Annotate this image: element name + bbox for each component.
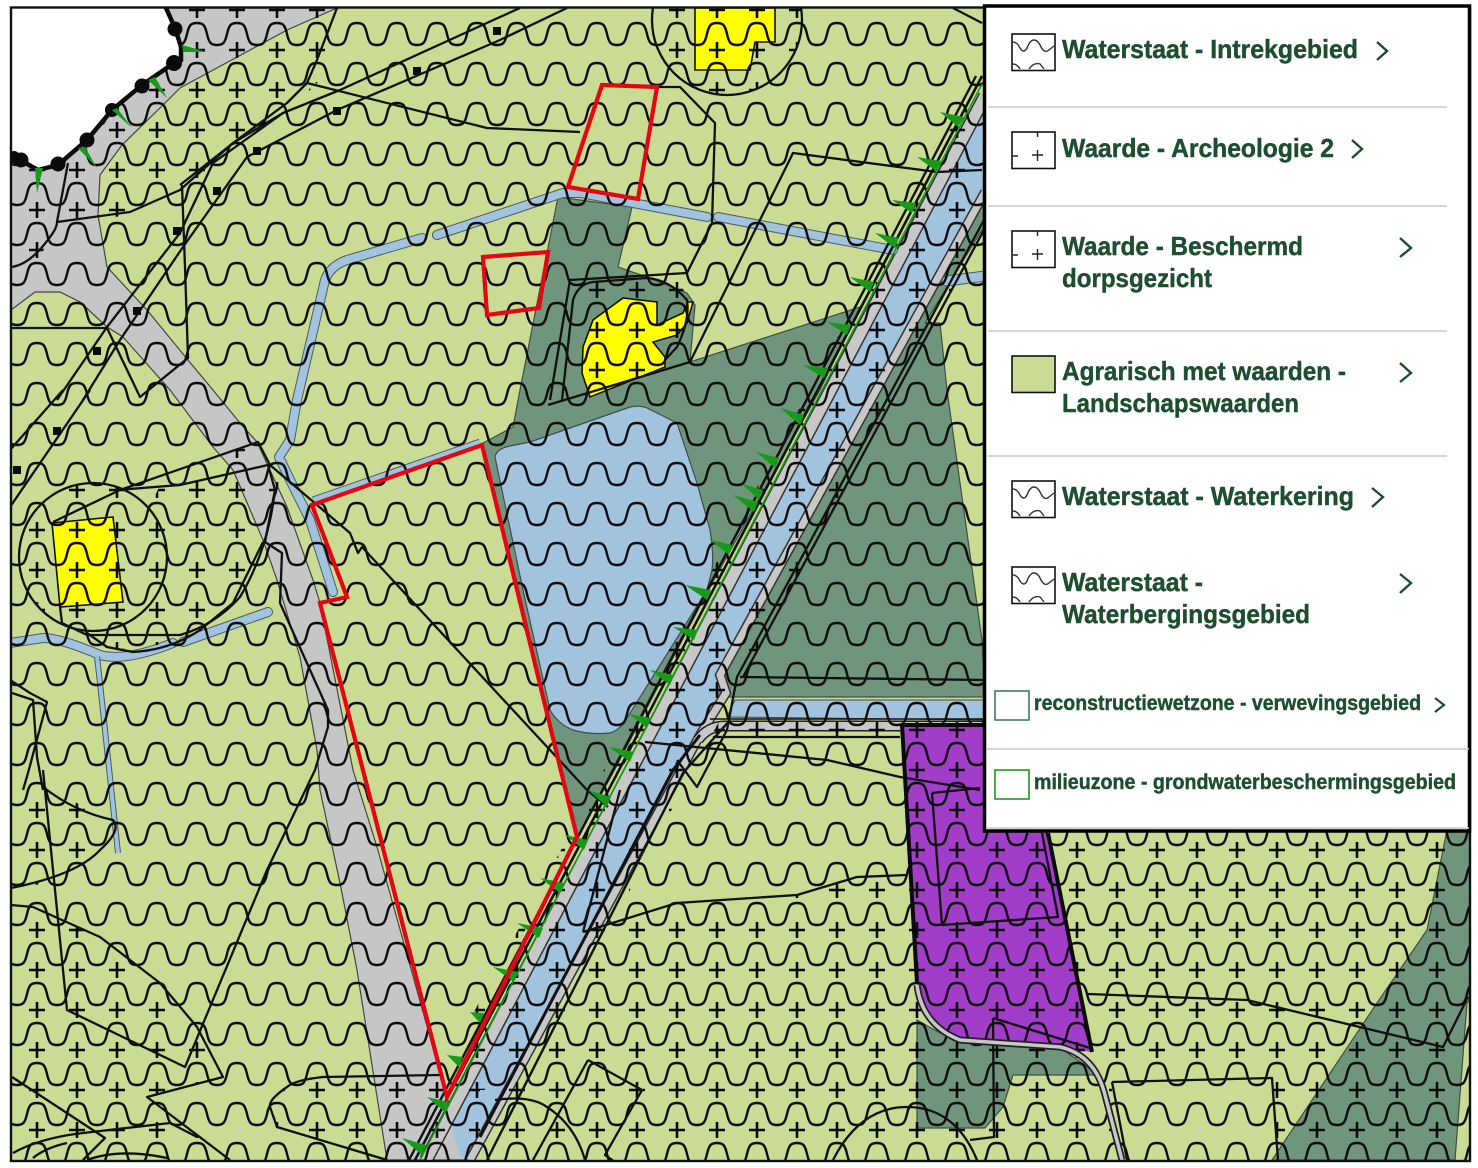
small black squares (13, 27, 501, 474)
loop road (917, 985, 1122, 1160)
legend item: milieuzone - grondwaterbeschermingsgebied (995, 770, 1456, 799)
legend item: Waarde - Archeologie 2: Waarde - Archeologie 2 (1062, 133, 1334, 163)
legend panel (984, 6, 1470, 831)
grey road (11, 8, 470, 1160)
legend item: reconstructiewetzone - verwevingsgebied: reconstructiewetzone - verwevingsgebied (1034, 692, 1421, 715)
white out-of-plan area (11, 8, 181, 170)
purple zone outline (902, 725, 1092, 1052)
legend item: Waterstaat - Intrekgebied (1012, 34, 1387, 70)
legend item: Waarde - Beschermd dorpsgezicht: dorpsgezicht (1062, 263, 1212, 293)
legend item: Agrarisch met waarden - Landschapswaarden: Agrarisch met waarden - (1062, 356, 1346, 386)
legend item: Waarde - Beschermd dorpsgezicht: Waarde - Beschermd (1062, 231, 1303, 261)
legend item: Waarde - Archeologie 2 (1012, 132, 1362, 168)
legend item: Agrarisch met waarden - Landschapswaarden (1012, 356, 1411, 418)
red parcel: large (312, 445, 577, 1097)
legend dividers (986, 107, 1469, 828)
horizontal water strip (727, 700, 985, 720)
railway road right (470, 192, 985, 1160)
red parcel: top (568, 85, 657, 199)
red parcel: small (483, 252, 548, 315)
horizontal road (698, 726, 985, 740)
legend item: milieuzone - grondwaterbeschermingsgebied: milieuzone - grondwaterbeschermingsgebied (1034, 771, 1456, 794)
legend item: Waterstaat - Waterkering (1012, 481, 1383, 518)
railway canal band (447, 105, 985, 1160)
legend item: Waterstaat - Waterbergingsgebied (1012, 567, 1411, 629)
green railway line (420, 84, 982, 1160)
dark green zones (482, 198, 1469, 1160)
legend item: Waterstaat - Waterkering: Waterstaat - Waterkering (1062, 481, 1354, 511)
legend item: Waterstaat - Intrekgebied: Waterstaat - Intrekgebied (1062, 34, 1358, 64)
ditches (10, 193, 985, 853)
lake (495, 406, 713, 734)
legend item: Waterstaat - Waterbergingsgebied: Waterstaat - (1062, 567, 1203, 597)
yellow zones (52, 8, 775, 607)
legend item: Agrarisch met waarden - Landschapswaarden: Landschapswaarden (1062, 388, 1299, 418)
railway road left (426, 96, 985, 1160)
purple zone (902, 725, 1092, 1052)
legend item: Waarde - Beschermd dorpsgezicht (1012, 231, 1411, 293)
green tick marks (35, 45, 964, 1155)
legend item: Waterstaat - Waterbergingsgebied: Waterbergingsgebied (1062, 599, 1310, 629)
plan boundary with dots (8, 8, 182, 172)
